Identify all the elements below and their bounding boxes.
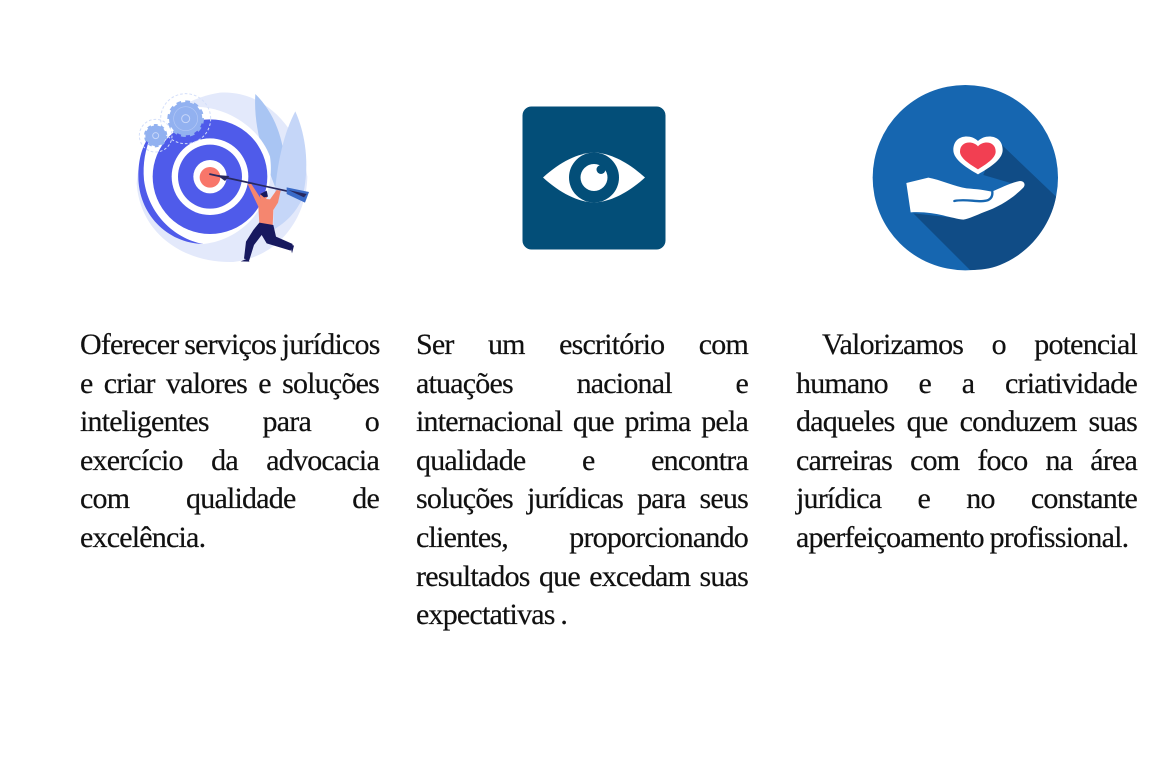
text block: missão: e criar valores e soluções (80, 367, 379, 400)
text block: visão (416, 328, 748, 631)
text block: valores: Valorizamos o potencial (822, 328, 1137, 361)
text block: visão: Ser um escritório com (416, 328, 748, 361)
text block: valores (795, 328, 1138, 554)
text block: visão: qualidade e encontra (416, 444, 748, 477)
text block: visão: atuações nacional e (416, 367, 748, 400)
text block: valores: aperfeiçoamento profissional. (796, 521, 1128, 554)
text block: valores: jurídica e no constante (796, 482, 1137, 515)
text block: visão: expectativas . (416, 598, 567, 631)
text block: valores: daqueles que conduzem suas (796, 405, 1137, 438)
text block: missão: excelência. (80, 521, 205, 554)
icon: target with arrow and running person (136, 92, 309, 262)
icon: eye in rounded square (522, 106, 666, 250)
text block: valores: humano e a criatividade (796, 367, 1137, 400)
text block: visão: clientes, proporcionando (416, 521, 748, 554)
text block: missão: inteligentes para o (80, 405, 379, 438)
icon: hand holding heart in blue circle (872, 85, 1058, 270)
text block: visão: soluções jurídicas para seus (416, 482, 748, 515)
text block: visão: resultados que excedam suas (416, 560, 748, 593)
text block: valores: carreiras com foco na área (796, 444, 1137, 477)
text block: missão (80, 328, 380, 554)
text block: visão: internacional que prima pela (416, 405, 748, 438)
text block: missão: Oferecer serviços jurídicos (80, 328, 380, 361)
text block: missão: com qualidade de (80, 482, 379, 515)
text block: missão: exercício da advocacia (80, 444, 379, 477)
